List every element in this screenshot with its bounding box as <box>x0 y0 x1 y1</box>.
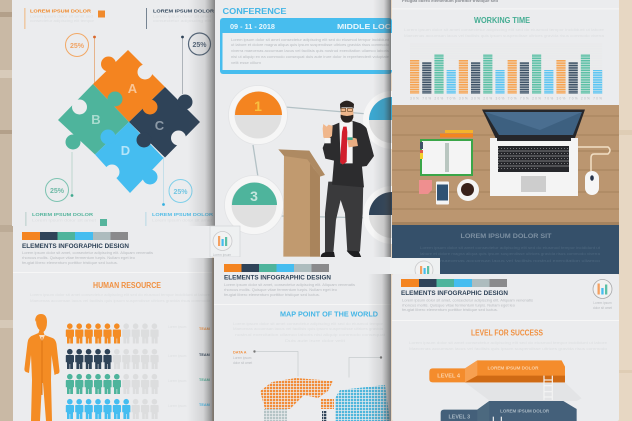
puzzle piece A: A <box>128 81 138 96</box>
description: Lorem ipsum dolor sit amet, consectetur adipiscing elit. Aliquam venenatis <box>402 298 534 302</box>
panel: puzzle page <box>12 0 216 226</box>
success blurb: Maecenas accumsan lacus vel facilisis quis ipsum suspendisse ultrices gravida risus commodo <box>409 347 607 351</box>
icon: chart badge <box>593 280 612 310</box>
tab with chart icon <box>390 258 440 279</box>
heading: human resource: HUMAN RESOURCE <box>93 281 161 290</box>
callout: green heading <box>26 212 107 226</box>
date box: ut labore et dolore magna aliqua quis ipsum suspendisse ultrices gravida risus commodo <box>231 43 389 47</box>
callout: dark heading: consectetur adipiscing elit <box>153 19 211 23</box>
panel: dark footer: maecenas accumsan lacus vel facilisis nostrud exercitation ullamco <box>440 259 600 263</box>
team labels: TEAM <box>199 378 210 382</box>
pictogram row: green <box>66 374 159 394</box>
date box: velit esse cillum <box>231 61 261 65</box>
level 4 step: LOREM IPSUM DOLOR <box>488 365 539 370</box>
colour swatches <box>401 279 507 287</box>
puzzle piece A <box>93 50 165 122</box>
human resource blurb: Maecenas accumsan lacus vel facilisis quis ipsum suspendisse ultrices gravida risus commodo <box>30 299 210 303</box>
team labels: TEAM <box>199 327 210 331</box>
team labels: TEAM <box>199 353 210 357</box>
shirt <box>339 121 353 163</box>
puzzle chart <box>58 50 200 193</box>
ladder <box>544 376 552 400</box>
description: feugiat libero elementum porttitor tristique sed luctus. <box>22 261 118 265</box>
tab with chart icon: Lorem ipsum <box>213 253 232 257</box>
step circle 2 <box>363 91 421 149</box>
callout: blue heading <box>146 212 214 226</box>
date box <box>220 18 392 74</box>
map blurb: Duis aute irure dolor velit <box>285 339 345 343</box>
title: ELEMENTS INFOGRAPHIC DESIGN <box>224 274 331 282</box>
description: Lorem ipsum dolor sit amet, consectetur adipiscing elit. Aliquam venenatis <box>224 283 356 287</box>
date box: nisi ut aliquip ex ea commodo consequat duis aute irure dolor in reprehenderit voluptate <box>231 55 389 59</box>
badge: orange 25% <box>66 34 88 56</box>
description: feugiat libero elementum porttitor tristique sed luctus. <box>402 308 498 312</box>
description <box>402 298 534 312</box>
team labels: TEAM <box>199 403 210 407</box>
team labels: Lorem ipsum <box>168 404 187 408</box>
heading: map point: MAP POINT OF THE WORLD <box>280 310 379 318</box>
panel: dark footer: Lorem ipsum dolor sit amet consectetur adipiscing elit sed do eiusmod tempor incididunt ut <box>420 246 600 250</box>
puzzle piece D: D <box>121 143 130 158</box>
description: Lorem ipsum dolor sit amet, consectetur adipiscing elit. Aliquam venenatis <box>22 251 154 255</box>
team labels <box>168 325 210 408</box>
panel: map page <box>214 257 440 421</box>
human resource blurb <box>30 293 210 303</box>
heading: level for success: LEVEL FOR SUCCESS <box>471 328 543 338</box>
trousers <box>325 182 363 253</box>
team labels: Lorem ipsum <box>168 325 187 329</box>
map blurb: nostrud exercitation ullamco laboris nisi aliquip commodo consequat <box>235 333 385 337</box>
team labels: Lorem ipsum <box>168 379 187 383</box>
desk scene <box>392 105 619 225</box>
tab with chart icon <box>210 226 240 257</box>
badge: green 25% <box>46 178 68 202</box>
text: working time blurb: Lorem ipsum dolor sit amet consectetur adipiscing elit sed do eiusmod tempor incididunt ut labore <box>404 28 604 32</box>
description: rhoncus mollis. Quisque vitae fermentum turpis. Nullam eget leo <box>224 288 337 292</box>
step circle 3 <box>224 176 284 234</box>
panel: conference page <box>215 0 421 258</box>
callout: data a <box>233 350 298 376</box>
pictogram row: navy <box>66 349 159 369</box>
panel: dark footer: labore et dolore magna aliqua quis ipsum suspendisse ultrices gravida risus commodo viverra <box>420 252 600 256</box>
description <box>224 283 356 297</box>
date box: Lorem ipsum dolor sit amet consectetur adipiscing elit sed do eiusmod tempor incididunt <box>231 38 389 42</box>
puzzle piece C: C <box>155 118 165 133</box>
map blurb: Lorem ipsum dolor sit amet consectetur adipiscing elit sed do eiusmod tempor <box>233 322 384 326</box>
team labels: Lorem ipsum <box>168 354 187 358</box>
icon: phone <box>436 182 449 204</box>
dotted world map <box>260 378 390 421</box>
date box: viverra maecenas accumsan lacus vel facilisis quis nostrud exercitation ullamco laboris <box>231 49 390 53</box>
step circle 1: 1 <box>254 98 262 114</box>
puzzle piece C <box>129 87 200 158</box>
badge: dark 25% <box>188 33 210 55</box>
callout: green heading: LOREM IPSUM DOLOR <box>32 212 94 217</box>
icon: notebook and books <box>420 130 473 176</box>
figure: orange man <box>24 314 59 421</box>
date box: 09 - 11 - 2018 <box>230 22 275 31</box>
success blurb: Lorem ipsum dolor sit amet consectetur adipiscing elit sed do eiusmod tempor incididunt ut labore <box>409 341 607 345</box>
callout: dark heading <box>146 8 215 29</box>
description: feugiat libero elementum porttitor tristique sed luctus. <box>224 293 320 297</box>
head <box>341 109 353 123</box>
level 3 step <box>441 401 577 421</box>
panel: level for success page <box>392 274 619 421</box>
panel: working time page <box>392 0 619 106</box>
date box: MIDDLE LOC <box>337 22 392 31</box>
title: ELEMENTS INFOGRAPHIC DESIGN <box>401 290 508 297</box>
text: working time blurb <box>404 28 604 38</box>
puzzle piece B: B <box>91 112 101 127</box>
callout: orange heading: consectetur adipiscing elit tempor <box>30 19 95 23</box>
speaker figure <box>321 101 374 257</box>
connector lines and dots <box>71 36 184 206</box>
callout: dark heading: LOREM IPSUM DOLOR <box>153 8 215 14</box>
step circle 1 <box>228 86 288 144</box>
callout: data a: dolor sit amet <box>233 361 252 365</box>
heading: working time: WORKING TIME <box>474 16 530 25</box>
puzzle piece D <box>95 122 164 193</box>
callout: blue heading: Lorem ipsum dolor sit amet <box>152 218 212 222</box>
level 4 step <box>429 360 582 401</box>
callout: data a: Lorem ipsum <box>233 356 252 360</box>
callout: data a: DATA A <box>233 350 247 354</box>
level 4 step: LEVEL 4 <box>437 373 461 379</box>
human resource blurb: Lorem ipsum dolor sit amet consectetur adipiscing elit sed do eiusmod tempor incididunt ut labore <box>30 293 210 297</box>
title: ELEMENTS INFOGRAPHIC DESIGN <box>22 243 129 250</box>
badge: green 25%: 25% <box>50 188 65 195</box>
connector lines <box>253 107 375 218</box>
colour swatches <box>22 232 128 240</box>
text: working time blurb: Maecenas accumsan lacus vel facilisis quis ipsum suspendisse ultrices gravida risus commodo viverra <box>404 34 604 38</box>
puzzle piece B <box>58 84 129 154</box>
podium <box>278 149 325 257</box>
callout: data b <box>349 356 382 378</box>
heading: conference: CONFERENCE <box>222 7 287 16</box>
badge: blue 25%: 25% <box>173 189 188 196</box>
bar chart <box>410 43 602 100</box>
panel: human resource page <box>13 226 240 421</box>
description <box>22 251 154 265</box>
jacket <box>323 121 374 187</box>
badge: blue 25% <box>169 180 192 202</box>
description: rhoncus mollis. Quisque vitae fermentum turpis. Nullam eget leo <box>22 256 135 260</box>
icon: mouse and cable <box>578 147 610 195</box>
map blurb: Maecenas accumsan lacus vel facilisis quis ipsum suspendisse ultrices gravida <box>233 327 383 331</box>
pictogram row: orange <box>66 323 159 344</box>
icon: chart badge: Lorem ipsum <box>593 301 612 305</box>
callout: orange heading: LOREM IPSUM DOLOR <box>30 8 92 14</box>
step circle 4 <box>363 186 421 244</box>
callout: dark heading: Lorem ipsum dolor sit amet <box>153 14 211 18</box>
panel: dark footer <box>392 225 619 274</box>
colour swatches <box>224 264 329 272</box>
success blurb <box>409 341 607 351</box>
right hand <box>347 138 358 147</box>
panel: dark footer: LOREM IPSUM DOLOR SIT <box>460 233 552 240</box>
map blurb <box>233 322 385 343</box>
badge: orange 25%: 25% <box>70 43 85 50</box>
bar chart: 30% 70% 20% 70% 30% 30% 20% 30% 70% 70% 20% 70% 30% 70% 20% 70% <box>410 96 602 100</box>
callout: blue heading: LOREM IPSUM DOLOR <box>152 212 214 217</box>
pictogram row: blue <box>66 399 159 419</box>
shoes <box>321 251 361 257</box>
icon: sticky note <box>419 180 432 194</box>
level 3 step: LEVEL 3 <box>449 415 470 421</box>
level 3 step: LOREM IPSUM DOLOR <box>500 408 550 413</box>
step circle 3: 3 <box>250 188 258 204</box>
icon: coffee cup <box>457 179 479 201</box>
callout: orange heading: Lorem ipsum dolor sit amet sed <box>30 14 93 18</box>
callout: orange heading <box>24 8 105 29</box>
badge: dark 25%: 25% <box>192 42 207 49</box>
callout: green heading: Lorem ipsum dolor sit amet <box>32 218 96 222</box>
icon: laptop <box>482 110 585 196</box>
tie <box>340 127 347 165</box>
icon: chart badge: dolor sit amet <box>593 306 612 310</box>
left hand <box>323 124 333 140</box>
description: rhoncus mollis. Quisque vitae fermentum turpis. Nullam eget leo <box>402 304 515 308</box>
